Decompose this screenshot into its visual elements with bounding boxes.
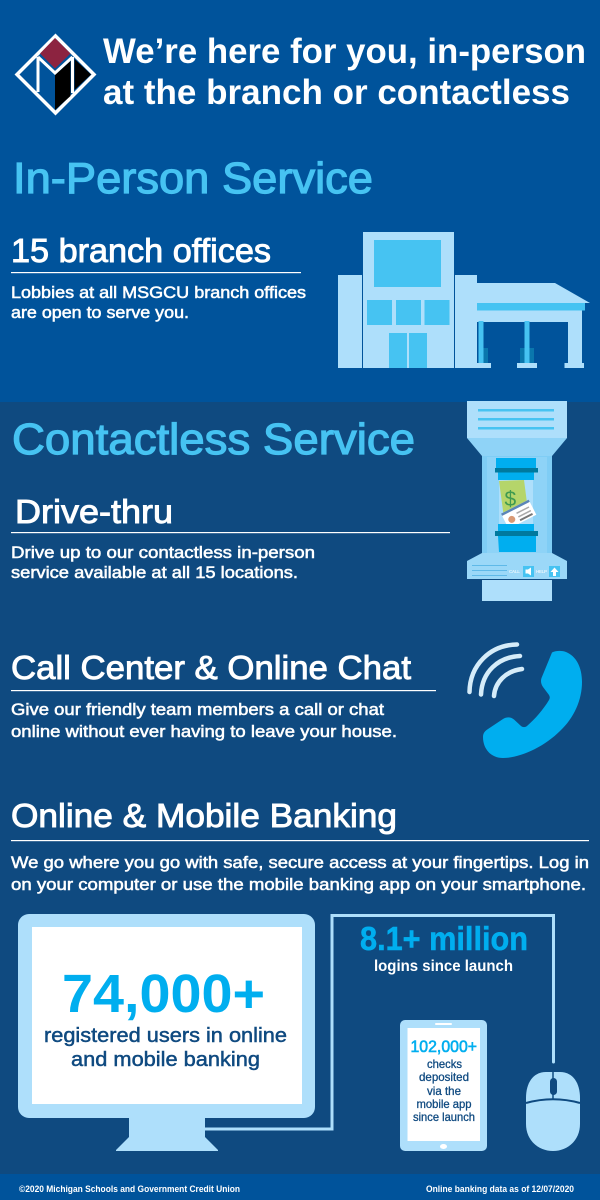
panel: online and mobile banking (11, 797, 589, 894)
footer: ©2020 Michigan Schools and Government Credit Union (19, 1184, 240, 1194)
heading: 15 branch offices: 15 branch offices (11, 232, 271, 269)
icon: drive-thru teller machine: CALL (509, 569, 520, 574)
heading: Contactless Service: Contactless Service (12, 415, 415, 464)
stat label: checks deposited: deposited (419, 1070, 469, 1084)
stat: 8.1+ million logins (360, 920, 528, 975)
footer: Online banking data as of 12/07/2020 (426, 1184, 574, 1194)
stat: 8.1+ million logins: logins since launch (374, 958, 513, 975)
text: drive-thru description (11, 543, 315, 582)
text: drive-thru description: Drive up to our contactless in-person (11, 543, 315, 562)
icon: tablet with statistic (400, 1020, 487, 1151)
stat: 8.1+ million logins: 8.1+ million (360, 920, 528, 957)
stat: 74,000+: 74,000+ (62, 964, 265, 1024)
stat label: checks deposited: via the (427, 1084, 461, 1098)
panel: call center (11, 649, 436, 741)
panel: branch offices (11, 232, 306, 322)
icon: telephone (470, 644, 582, 758)
text: lobbies: Lobbies at all MSGCU branch offices (11, 283, 306, 302)
text: call center description (11, 700, 397, 741)
stat label: checks deposited: mobile app (416, 1097, 472, 1111)
icon: desktop monitor with statistic (18, 914, 315, 1151)
stat label: registered users: and mobile banking (71, 1048, 260, 1071)
footer (19, 1184, 574, 1194)
stat: 102,000+: 102,000+ (410, 1038, 477, 1056)
stat label: registered users (44, 1024, 287, 1071)
text: online banking description: on your computer or use the mobile banking app on your smartphone. (11, 875, 586, 894)
icon: drive-thru teller machine (467, 401, 567, 601)
heading: Online & Mobile Banking: Online & Mobile Banking (11, 797, 397, 834)
logo: MSGCU diamond (17, 36, 94, 113)
title (103, 32, 586, 112)
title: at the branch or contactless (103, 73, 570, 112)
stat label: checks deposited: checks (427, 1057, 462, 1071)
stat label: checks deposited (413, 1057, 475, 1124)
stat label: checks deposited: since launch (413, 1110, 475, 1124)
text: call center description: online without ever having to leave your house. (11, 722, 397, 741)
text: lobbies (11, 283, 306, 322)
heading: Call Center & Online Chat: Call Center & Online Chat (11, 649, 411, 686)
icon: drive-thru teller machine: HELP (536, 569, 547, 574)
mouse cable (205, 916, 554, 1129)
text: lobbies: are open to serve you. (11, 303, 189, 322)
stat label: registered users: registered users in online (44, 1024, 287, 1047)
icon: drive-thru teller machine: $ (504, 488, 516, 511)
text: drive-thru description: service available at all 15 locations. (11, 563, 298, 582)
text: online banking description (11, 853, 589, 894)
title: We’re here for you, in-person (103, 32, 586, 71)
icon: computer mouse (526, 1072, 580, 1151)
text: online banking description: We go where you go with safe, secure access at your fingertips. Log in (11, 853, 589, 872)
panel: drive-thru (11, 493, 450, 582)
icon: branch building (338, 232, 590, 368)
heading: In-Person Service: In-Person Service (13, 154, 373, 203)
heading: Drive-thru: Drive-thru (15, 493, 173, 530)
text: call center description: Give our friendly team members a call or chat (11, 700, 384, 719)
